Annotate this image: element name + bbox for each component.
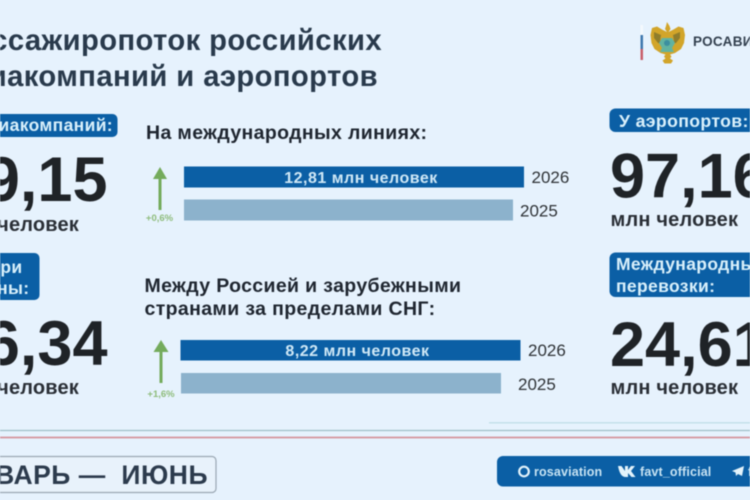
- icon: telegram: [732, 466, 744, 476]
- arrow: growth 0.6%: [146, 167, 174, 224]
- bar: 2026: 8,22 млн человек: [285, 343, 430, 360]
- heading: beyond CIS: странами за пределами СНГ:: [144, 298, 435, 320]
- label: domestic: [0, 253, 40, 300]
- heading: beyond CIS: [144, 275, 461, 320]
- chart: beyond CIS: [144, 275, 566, 400]
- label: international: [610, 252, 750, 297]
- panel: airlines: [0, 114, 118, 236]
- panel: domestic: [0, 253, 108, 399]
- bar: 2026: 12,81 млн человек: [284, 170, 438, 187]
- icon: VK: [618, 466, 636, 477]
- bar: 2025: [184, 200, 513, 220]
- bar: 2025: [181, 373, 501, 394]
- unit: airports: млн человек: [610, 209, 739, 231]
- social links panel: [497, 456, 750, 486]
- year: 2025: 2025: [520, 202, 558, 220]
- label: airports: У аэропортов:: [619, 111, 749, 131]
- unit: international: млн человек: [610, 377, 739, 399]
- panel: international: [610, 252, 750, 399]
- handle: rosaviation: rosaviation: [534, 465, 602, 479]
- panel: airports: [610, 108, 750, 231]
- arrow: growth 0.6%: +0,6%: [146, 213, 174, 224]
- label: international: перевозки:: [616, 276, 715, 296]
- arrow: growth 1.6%: +1,6%: [147, 389, 175, 400]
- heading: beyond CIS: Между Россией и зарубежными: [144, 275, 461, 297]
- logo: Rosaviation: [640, 22, 750, 64]
- year: 2026: 2026: [532, 168, 569, 187]
- chart: international lines: [146, 122, 569, 224]
- bar: 2026: [184, 166, 524, 188]
- handle: favt_official: favt_official: [640, 465, 711, 479]
- arrow: growth 1.6%: [147, 340, 175, 400]
- heading: international lines: На международных линиях:: [146, 122, 427, 144]
- icon: rosaviation chat: [519, 467, 529, 476]
- year: 2026: 2026: [528, 341, 566, 360]
- title: [0, 25, 382, 93]
- year: 2025: 2025: [518, 375, 556, 394]
- bar: 2026: [180, 340, 520, 360]
